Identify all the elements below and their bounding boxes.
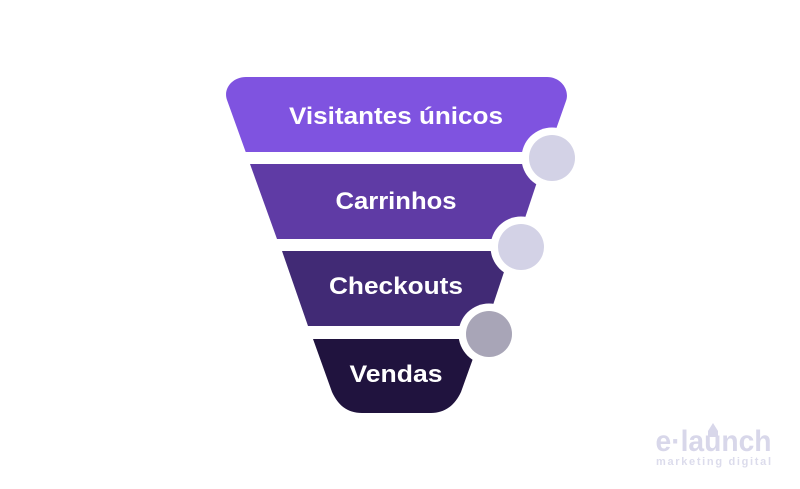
logo: e-launch bbox=[656, 423, 772, 468]
band: Visitantes únicos bbox=[226, 77, 567, 152]
band: Vendas: Vendas bbox=[350, 361, 442, 388]
marker: circle 1 bbox=[522, 128, 582, 188]
logo tagline: marketing digital bbox=[656, 456, 771, 468]
funnel bbox=[226, 77, 567, 413]
band: Vendas bbox=[313, 339, 480, 413]
marker: circle 2 bbox=[490, 216, 552, 278]
icon: rocket bbox=[708, 423, 718, 437]
band: Checkouts: Checkouts bbox=[329, 273, 463, 300]
band: Visitantes únicos: Visitantes únicos bbox=[289, 103, 503, 130]
band: Carrinhos bbox=[250, 164, 543, 239]
band: Checkouts bbox=[282, 251, 511, 326]
logo wordmark: e·launch bbox=[656, 425, 772, 458]
band: Carrinhos: Carrinhos bbox=[336, 188, 456, 215]
marker: circle 3 bbox=[458, 304, 520, 364]
